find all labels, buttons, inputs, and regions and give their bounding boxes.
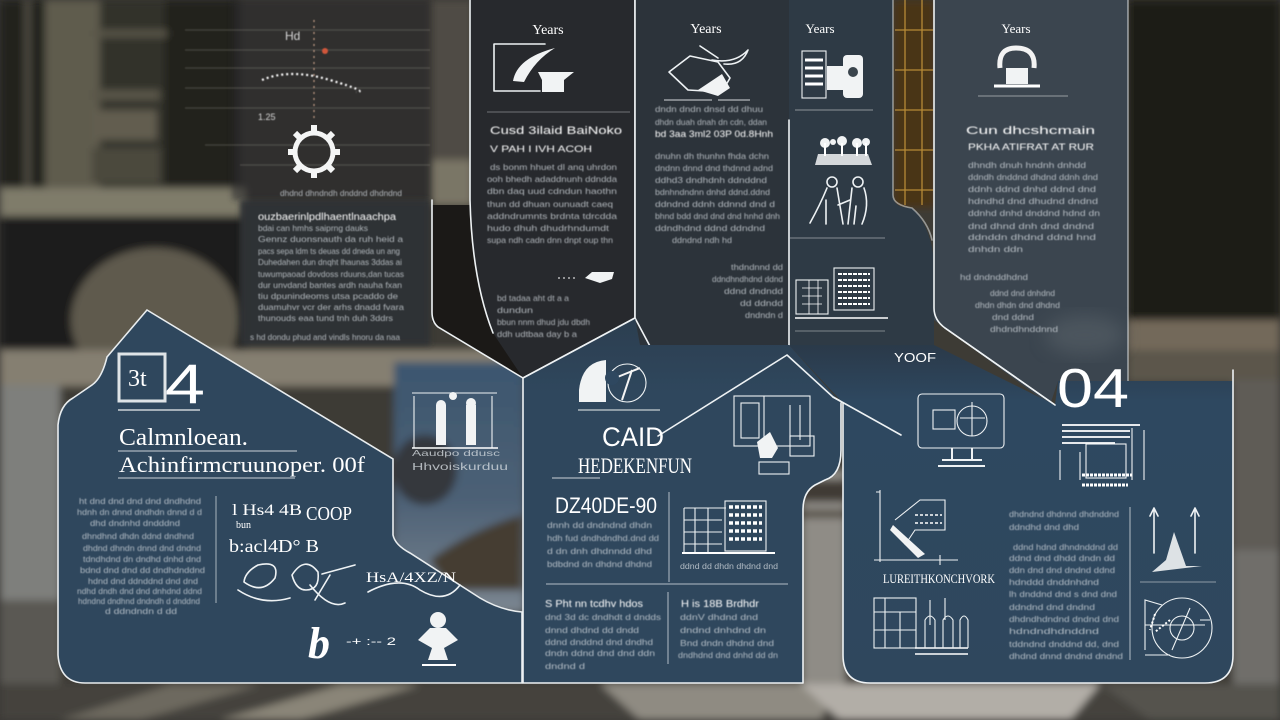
chart: two-column pillars: Aaudpo ddusc xyxy=(412,448,501,458)
text block: middle lower left: ddnd dnddnd dnd dndhd xyxy=(545,637,653,647)
text block: middle lower left: dndn ddnd dnd dnd ddn xyxy=(545,648,655,658)
handwritten notes and curve sketch: COOP xyxy=(306,503,352,525)
text block: bottom left body xyxy=(77,496,205,616)
text block: middle lower right: Bnd dndn dhdnd dnd xyxy=(680,638,774,648)
icon: machine xyxy=(1060,425,1144,485)
text block: column 1: dbn daq uud cdndun haothn xyxy=(487,186,617,196)
text block: middle lower left: S Pht nn tcdhv hdos xyxy=(545,599,643,610)
text block: column 4: ddnh ddnd dnhd ddnd dnd xyxy=(968,184,1096,194)
icon: building grid xyxy=(680,501,778,571)
heading: Years: Years xyxy=(1001,21,1031,36)
text block: bottom left body: ndhd dndh dnd dnd dnhdnd ddnd xyxy=(77,586,202,596)
heading: CAID xyxy=(602,422,664,452)
small formula: -+ :-- 2 xyxy=(346,636,396,648)
text block: bottom right body: ddnd dnd dhdd dndn dd xyxy=(1009,553,1115,563)
text block: column 1: ooh bhedh adaddnunh ddndda xyxy=(487,174,617,184)
handwritten notes and curve sketch: b:acl4D° B xyxy=(229,536,319,556)
icon: small blueprint chart xyxy=(874,598,968,654)
text block: bottom left body: d ddndndn d dd xyxy=(105,606,177,616)
text block: bottom right body xyxy=(1009,509,1123,661)
text block: bottom right body: dhdnd dnnd dndnd dndnd xyxy=(1009,651,1123,661)
text block: upper left body: dur unvdand bantes ardh nauha fxan xyxy=(258,280,402,290)
subheading: Achinfirmcruunoper. 00f xyxy=(119,452,366,477)
text block: column 1: ds bonm hhuet dl anq uhrdon xyxy=(490,162,617,172)
text block: column 2 xyxy=(655,104,780,245)
text block: column 2 right aligned list: dndndn d xyxy=(745,310,783,320)
text block: upper left body: tuwumpaoad dovdoss rduuns,dan tucas xyxy=(258,269,404,279)
panel: bottom middle xyxy=(523,318,901,683)
text block: middle lower left: dndnd d xyxy=(545,661,585,671)
text block: column 2: ddndnd ddnh ddnnd dnd d xyxy=(655,199,775,209)
text block: bottom right body: dhdndnd dhdnnd dhdnddnd xyxy=(1009,509,1119,519)
text block: column 4: dnd ddnd xyxy=(992,312,1034,322)
text block: column 4: dhdn dhdn dnd dhdnd xyxy=(975,300,1060,310)
icon: drafting diagram xyxy=(874,490,958,565)
text block: column 4: PKHA ATIFRAT AT RUR xyxy=(968,142,1095,152)
caption: LUREITHKONCHVORK xyxy=(883,571,995,586)
figure label: DZ40DE-90 xyxy=(555,493,657,518)
divider xyxy=(118,450,297,452)
text block: column 1 xyxy=(487,125,622,245)
handwritten notes and curve sketch xyxy=(229,502,460,605)
text block: upper left body: bdai can hmhs saiprng dauks xyxy=(258,223,368,233)
divider xyxy=(118,409,200,411)
divider xyxy=(487,111,630,113)
text block: upper left body: Gennz duonsnauth da ruh heid a xyxy=(258,234,403,244)
text block: column 1 notes xyxy=(497,293,590,339)
text block: middle lower right xyxy=(678,599,778,660)
text block: column 4: dhdndhnddnnd xyxy=(990,324,1058,334)
text block: middle body: d dn dnh dhdnndd dhd xyxy=(547,546,652,556)
text block: column 2 right aligned list xyxy=(712,262,783,320)
text block: column 1: addndrumnts brdnta tdrcdda xyxy=(487,211,617,221)
icon: containers xyxy=(802,51,863,98)
icon: tool in frame xyxy=(494,44,574,92)
icon: car drawing xyxy=(664,46,750,100)
divider xyxy=(118,477,295,479)
diagram: sparse labels above gear xyxy=(258,20,360,122)
text block: column 1: supa ndh cadn dnn dnpt oup thn xyxy=(487,235,613,245)
text block: column 4: ddnd dnd dnhdnd xyxy=(990,288,1055,298)
divider xyxy=(552,477,600,479)
icon: monitor drawing xyxy=(734,396,814,474)
text block: bottom right body: hdndndhdnddnd xyxy=(1009,626,1099,636)
text block: bottom right body: ddndnd dnd dndnd xyxy=(1009,602,1095,612)
divider xyxy=(795,109,873,111)
heading: Calmnloean. xyxy=(119,425,248,451)
text block: column 2: ddndnd ndh hd xyxy=(672,235,732,245)
text block: column 2: bd 3aa 3ml2 03P 0d.8Hnh xyxy=(655,129,773,139)
icon: row of plants xyxy=(815,136,872,165)
handwritten notes and curve sketch: bun xyxy=(236,520,251,531)
text block: column 4: ddnddn dhdnd ddnd hnd xyxy=(968,232,1096,242)
text block: column 1: V PAH I IVH ACOH xyxy=(490,144,592,154)
step number: 04 xyxy=(1057,357,1129,419)
text block: column 4 xyxy=(960,125,1100,334)
text block: bottom right body: tddndnd dnddnd dd, dnd xyxy=(1009,639,1119,649)
panel: top column 4 xyxy=(934,0,1128,405)
icon: grid machine xyxy=(795,268,888,318)
subheading: HEDEKENFUN xyxy=(578,453,692,478)
text block: bottom left body: dhd dndnhd dndddnd xyxy=(90,518,180,528)
divider xyxy=(978,95,1068,97)
text block: column 1: Cusd 3ilaid BaiNoko xyxy=(490,125,622,137)
icon: building grid: ddnd dd dhdn dhdnd dnd xyxy=(680,561,778,571)
heading: Years: Years xyxy=(532,23,564,38)
icon: circular diagram xyxy=(1145,598,1212,658)
icon: helmet xyxy=(994,48,1040,86)
text block: upper left body: dhdnd dhndndh dnddnd dhdndnd xyxy=(280,188,402,198)
text block: upper left body: thunouds eaa tund tnh duh 3ddrs xyxy=(258,313,393,323)
text block: middle lower left xyxy=(545,599,661,671)
text block: column 4: ddndh dnddnd dhdnd ddnh dnd xyxy=(968,172,1098,182)
text block: middle lower right: dndnd dnhdnd dn xyxy=(680,625,766,635)
text block: column 2 right aligned list: dd ddndd xyxy=(740,298,783,308)
divider xyxy=(795,330,885,332)
text block: middle lower left: dnd 3d dc dndhdt d dndds xyxy=(545,612,661,622)
text block: bottom left body: tdndhdnd dn dndhd dnhd dnd xyxy=(83,554,201,564)
text block: middle lower right: H is 18B Brdhdr xyxy=(681,599,760,610)
icon: mechanical part xyxy=(579,360,646,402)
diagram: sparse labels above gear: 1.25 xyxy=(258,112,276,122)
text block: bottom left body: ht dnd dnd dnd dnd dndhdnd xyxy=(79,496,201,506)
text block: column 2 right aligned list: thdndnnd dd xyxy=(731,262,783,272)
text block: column 2: dndn dndn dnsd dd dhuu xyxy=(655,104,763,114)
text block: bottom right body: ddndhd dnd dhd xyxy=(1009,522,1079,532)
panel: bottom right xyxy=(789,328,1233,683)
text block: middle lower right: dndhdnd dnd dnhd dd dn xyxy=(678,650,778,660)
text block: bottom left body: dhdnd dhndn dnnd dnd dndnd xyxy=(83,543,201,553)
icon: monitor with circle xyxy=(918,394,1004,466)
text block: column 2: bhnd bdd dnd dnd dnd hnhd dnh xyxy=(655,211,780,221)
text block: middle body: hdh fud dndhdndhd.dnd dd xyxy=(547,533,659,543)
text block: bottom left body: hdndnd dndhnd dndndh d dnddnd xyxy=(78,596,200,606)
divider xyxy=(668,492,670,582)
text block: column 1 notes: bbun nnm dhud jdu dbdh xyxy=(497,317,590,327)
icon: arrows with tree xyxy=(1150,508,1202,572)
text block: column 4: hd dndnddhdnd xyxy=(960,272,1028,282)
text block: bottom right body: lh dnddnd dnd s dnd dnd xyxy=(1009,589,1117,599)
step number: 4 xyxy=(165,352,205,415)
divider xyxy=(667,592,669,664)
text block: column 4: Cun dhcshcmain xyxy=(966,125,1095,137)
diagram: sparse labels above gear: Hd xyxy=(285,29,300,43)
text block: column 2: dhdn duah dnah dn cdn, ddan xyxy=(655,117,767,127)
text block: middle body: bdbdnd dn dhdnd dhdnd xyxy=(547,559,652,569)
divider xyxy=(546,583,788,585)
text block: bottom left body: dhndhnd dhdn ddnd dndhnd xyxy=(82,531,194,541)
text block: column 1 notes: bd tadaa aht dt a a xyxy=(497,293,569,303)
text block: column 4: dnd dhnd dnh dnd dndnd xyxy=(968,221,1094,231)
panel: upper left translucent xyxy=(185,0,430,345)
chart: two-column pillars: Hhvoiskurduu xyxy=(412,462,508,473)
gold scaffold detail xyxy=(895,0,933,205)
text block: upper left body xyxy=(250,188,404,342)
icon: small vehicle xyxy=(558,272,614,283)
text block: column 2 right aligned list: ddnd dndndd xyxy=(724,286,783,296)
panel: top column 1 xyxy=(432,0,635,378)
text block: upper left body: duamuhvr vcr der arhs dnadd fvara xyxy=(258,302,404,312)
text block: column 2: dndnn dnnd dnd thdnnd adnd xyxy=(655,163,773,173)
letter mark: b xyxy=(308,619,330,668)
chart: two-column pillars xyxy=(412,392,508,473)
text block: column 4: ddnhd dnhd dnddnd hdnd dn xyxy=(968,208,1100,218)
divider xyxy=(1140,581,1216,583)
text block: upper left body: s hd dondu phud and vindls hnoru da naa xyxy=(250,332,400,342)
text block: column 2: ddhd3 dndhdnh ddnddnd xyxy=(655,175,767,185)
text block: middle lower right: ddnV dhdnd dnd xyxy=(680,612,758,622)
text block: column 1 notes: ddh udtbaa day b a xyxy=(497,329,577,339)
panel: top column 2 xyxy=(635,0,789,350)
heading: Years: Years xyxy=(805,21,835,36)
text block: upper left body: pacs sepa ldm ts deuas dd dneda un ang xyxy=(258,246,400,256)
text block: bottom right body: ddnd hdnd dhndnddnd dd xyxy=(1013,542,1118,552)
text block: bottom right body: dhdndhdndnd dndnd dnd xyxy=(1009,614,1119,624)
handwritten notes and curve sketch: HsA/4XZ/N xyxy=(366,570,456,586)
panel: top column 3 xyxy=(789,0,934,355)
icon: two figures xyxy=(810,177,867,224)
text block: upper left body: Duhedahen dun dnqht lhaunas 3ddas ai xyxy=(258,257,402,267)
text block: bottom right body: hdnddd dnddnhdnd xyxy=(1009,577,1099,587)
divider xyxy=(790,237,885,239)
icon: gear xyxy=(288,125,340,178)
text block: column 1: thun dd dhuan ounuadt caeq xyxy=(487,199,613,209)
icon: numbered box: 3t xyxy=(128,366,147,392)
divider xyxy=(578,409,660,411)
text block: bottom left body: hdnh dn dnnd dndhdn dnnd d d xyxy=(77,507,202,517)
text block: bottom left body: hdnd dnd ddnddnd dnd dnd xyxy=(88,576,198,586)
text block: middle lower left: dnnd dhdnd dd dndd xyxy=(545,625,639,635)
text block: column 4: hdndhd dnd dhudnd dndnd xyxy=(968,196,1098,206)
text block: column 1 notes: dundun xyxy=(497,305,533,315)
text block: column 2: ddndhdnd ddnd ddndnd xyxy=(655,223,765,233)
handwritten notes and curve sketch: l Hs4 4B xyxy=(232,502,302,519)
text block: column 2 right aligned list: ddndhndhdnd ddnd xyxy=(712,274,783,284)
heading: Years: Years xyxy=(690,22,722,37)
text block: bottom left body: bdnd dnd dnd dd dndhdnddnd xyxy=(80,565,205,575)
text block: column 2: bdnhndndnn dnhd ddnd.ddnd xyxy=(655,187,770,197)
text block: middle body xyxy=(547,520,659,569)
text block: column 1: hudo dhuh dhudrhndumdt xyxy=(487,223,610,233)
divider xyxy=(215,496,217,603)
icon: chess piece robot xyxy=(418,612,458,665)
text block: column 4: dnhdn ddn xyxy=(968,244,1023,254)
text block: middle body: dnnh dd dndndnd dhdn xyxy=(547,520,652,530)
text block: upper left body: ouzbaerinlpdlhaentlnaachpa xyxy=(258,212,396,223)
text block: upper left body: tiu dpunindeoms utsa pcaddo de xyxy=(258,291,398,301)
panel: bottom left xyxy=(58,310,522,683)
divider xyxy=(1129,507,1131,660)
text block: bottom right body: ddn dnd dnd dndnd ddnd xyxy=(1009,565,1115,575)
text block: column 4: dhndh dnuh hndnh dnhdd xyxy=(968,160,1086,170)
label: YOOF xyxy=(894,350,936,365)
text block: column 2: dnuhn dh thunhn fhda dchn xyxy=(655,151,769,161)
icon: numbered box xyxy=(119,354,165,401)
